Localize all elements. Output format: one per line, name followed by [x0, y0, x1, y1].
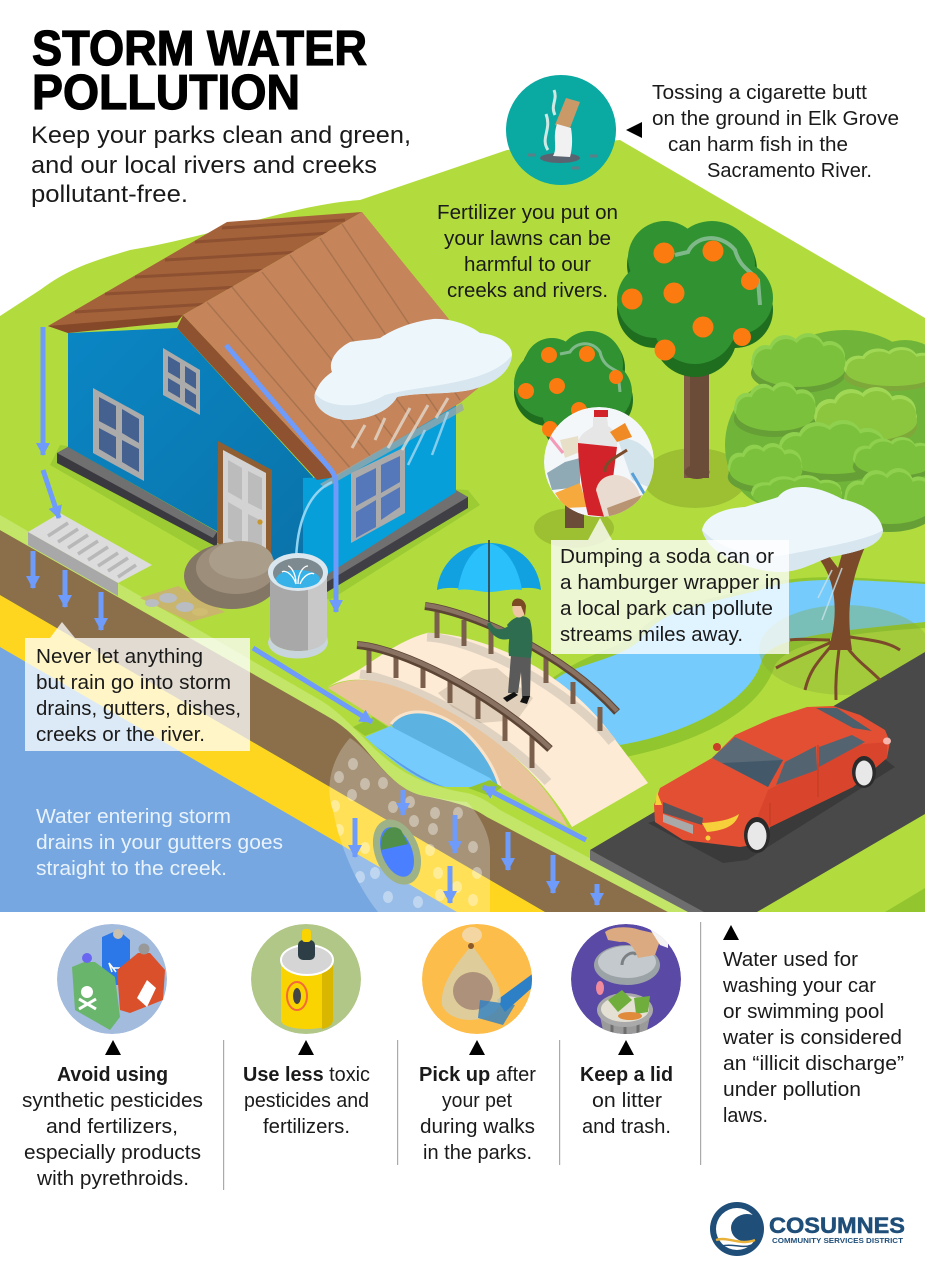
cigarette caption — [652, 81, 899, 182]
callout: never let anything — [25, 638, 250, 751]
cigarette caption: Tossing a cigarette butt — [652, 81, 867, 104]
arrow: cigarette pointer — [626, 122, 642, 138]
house ground shadow — [50, 445, 480, 600]
fertilizer caption: harmful to our — [464, 253, 591, 276]
water under bridge — [365, 712, 500, 790]
tip: keep a lid: Keep a lid — [580, 1063, 673, 1086]
fertilizer caption: Fertilizer you put on — [437, 201, 618, 224]
title: POLLUTION — [32, 66, 300, 120]
roof back — [48, 212, 362, 333]
arrow up 5 — [723, 925, 739, 940]
callout: never let anything: Never let anything — [36, 645, 203, 668]
road — [590, 652, 925, 912]
foundation — [57, 447, 468, 592]
tip: keep a lid: and trash. — [582, 1115, 671, 1138]
bridge deck — [327, 633, 648, 827]
grass ground — [0, 140, 925, 912]
subtitle: Keep your parks clean and green, — [31, 122, 411, 149]
right wall — [303, 403, 456, 590]
mirrors and tail-light — [768, 785, 788, 794]
icon: chemical jugs — [57, 924, 167, 1034]
orange tree large — [617, 221, 773, 508]
white caption: water entering: Water entering storm — [36, 805, 231, 828]
man with umbrella — [437, 540, 541, 704]
subtitle: pollutant-free. — [31, 181, 188, 208]
pointer under litter circle — [588, 518, 612, 540]
tip: avoid using: especially products — [24, 1141, 201, 1164]
white caption: water entering: drains in your gutters goes — [36, 831, 283, 854]
car shadow — [648, 753, 895, 863]
white caption: water entering — [36, 805, 283, 880]
stone path — [140, 586, 225, 622]
window right — [351, 447, 405, 543]
stream — [550, 577, 925, 758]
tip: avoid using — [22, 1063, 203, 1190]
title: STORM WATER — [32, 22, 367, 76]
title — [32, 22, 367, 120]
icon: trash can with lid — [571, 924, 681, 1040]
tip: water used: water is considered — [722, 1026, 902, 1049]
callout: dumping: a local park can pollute — [560, 597, 773, 620]
gutter — [320, 403, 464, 488]
icon: cigarette butt — [506, 75, 616, 185]
tip: water used — [722, 948, 904, 1127]
leafy tree with roots — [725, 330, 925, 700]
arrow up 2 — [298, 1040, 314, 1055]
car side panel — [758, 742, 887, 843]
foliage base — [725, 330, 925, 503]
panel: tips row — [22, 922, 904, 1190]
callout: never let anything: but rain go into storm — [36, 671, 231, 694]
pointer above never callout — [50, 622, 75, 638]
fertilizer caption — [437, 201, 618, 302]
tip: water used: an “illicit discharge” — [723, 1052, 904, 1075]
logo: Cosumnes: COSUMNES — [769, 1213, 905, 1238]
cloud over tree — [702, 487, 883, 620]
tip: use less: pesticides and — [244, 1089, 369, 1112]
arrow up 4 — [618, 1040, 634, 1055]
bridge side arch — [328, 680, 568, 827]
subtitle — [31, 122, 411, 208]
tip: avoid using: with pyrethroids. — [36, 1167, 189, 1190]
tip: use less: Use less toxic — [243, 1063, 370, 1086]
rail shadows on deck — [360, 637, 612, 782]
soil cross-section — [0, 515, 690, 912]
tip: avoid using: synthetic pesticides — [22, 1089, 203, 1112]
icon: litter circle — [544, 407, 655, 520]
tip: water used: washing your car — [722, 974, 876, 997]
tip: pick up — [419, 1063, 536, 1164]
tree root shadow — [759, 605, 925, 695]
rear railing — [425, 605, 617, 731]
car — [648, 706, 895, 863]
umbrella — [437, 540, 541, 622]
callout: never let anything: drains, gutters, dishes, — [36, 697, 241, 720]
cigarette caption: on the ground in Elk Grove — [652, 107, 899, 130]
callout: dumping: Dumping a soda can or — [560, 545, 774, 568]
cigarette caption: can harm fish in the — [668, 133, 848, 156]
fertilizer caption: your lawns can be — [444, 227, 611, 250]
tip: pick up: in the parks. — [423, 1141, 532, 1164]
roof fascia — [177, 315, 335, 480]
door — [217, 441, 272, 554]
window left large — [93, 388, 144, 481]
tip: pick up: Pick up after — [419, 1063, 536, 1086]
tip: water used: or swimming pool — [723, 1000, 884, 1023]
windscreen — [712, 737, 783, 787]
tip: use less — [243, 1063, 370, 1138]
storm drain grate — [28, 513, 152, 596]
side and rear windows — [776, 735, 865, 785]
grass patches by the water — [353, 717, 502, 796]
headlights — [702, 814, 739, 832]
tip: keep a lid — [580, 1063, 673, 1138]
logo: Cosumnes — [710, 1202, 905, 1256]
wheels — [744, 756, 876, 853]
arrow up 1 — [105, 1040, 121, 1055]
white caption: water entering: straight to the creek. — [36, 857, 227, 880]
tip: water used: under pollution — [723, 1078, 861, 1101]
orange tree small — [514, 331, 633, 548]
arrow up 3 — [469, 1040, 485, 1055]
tip: use less: fertilizers. — [263, 1115, 350, 1138]
callout: dumping: a hamburger wrapper in — [560, 571, 781, 594]
tip: pick up: your pet — [442, 1089, 512, 1112]
steps — [184, 541, 280, 609]
grille and plate — [663, 802, 703, 825]
front railing — [357, 644, 550, 768]
drain pipe — [364, 812, 430, 892]
roof front — [183, 212, 482, 477]
tip: keep a lid: on litter — [592, 1089, 662, 1112]
bridge — [327, 540, 648, 827]
blue flow arrows — [33, 327, 336, 630]
tip: pick up: during walks — [420, 1115, 535, 1138]
subtitle: and our local rivers and creeks — [31, 152, 377, 179]
magnified soil view — [320, 730, 500, 920]
fertilizer caption: creeks and rivers. — [447, 279, 608, 302]
window left small — [163, 348, 200, 415]
callout: never let anything: creeks or the river. — [36, 723, 205, 746]
tip: avoid using: Avoid using — [57, 1063, 168, 1086]
left wall — [68, 328, 313, 580]
cigarette caption: Sacramento River. — [707, 159, 872, 182]
tip: water used: laws. — [723, 1104, 768, 1127]
foliage clusters — [728, 333, 925, 532]
lower flow arrows — [355, 790, 597, 905]
cloud over roof with rain — [315, 319, 512, 465]
tip: water used: Water used for — [723, 948, 858, 971]
logo: Cosumnes: COMMUNITY SERVICES DISTRICT — [772, 1238, 904, 1245]
icon: pesticide spray can — [251, 924, 361, 1034]
car body — [654, 706, 890, 847]
landscape scene — [0, 140, 925, 920]
tip: avoid using: and fertilizers, — [46, 1115, 178, 1138]
flow arrows over the bank — [253, 648, 586, 840]
house — [28, 212, 482, 658]
icon: pet waste bag — [422, 924, 535, 1034]
man's shadow — [438, 668, 533, 723]
callout: dumping — [551, 540, 789, 654]
callout: dumping: streams miles away. — [560, 623, 743, 646]
rain barrel — [268, 553, 328, 658]
gutter spout stream — [295, 481, 332, 554]
